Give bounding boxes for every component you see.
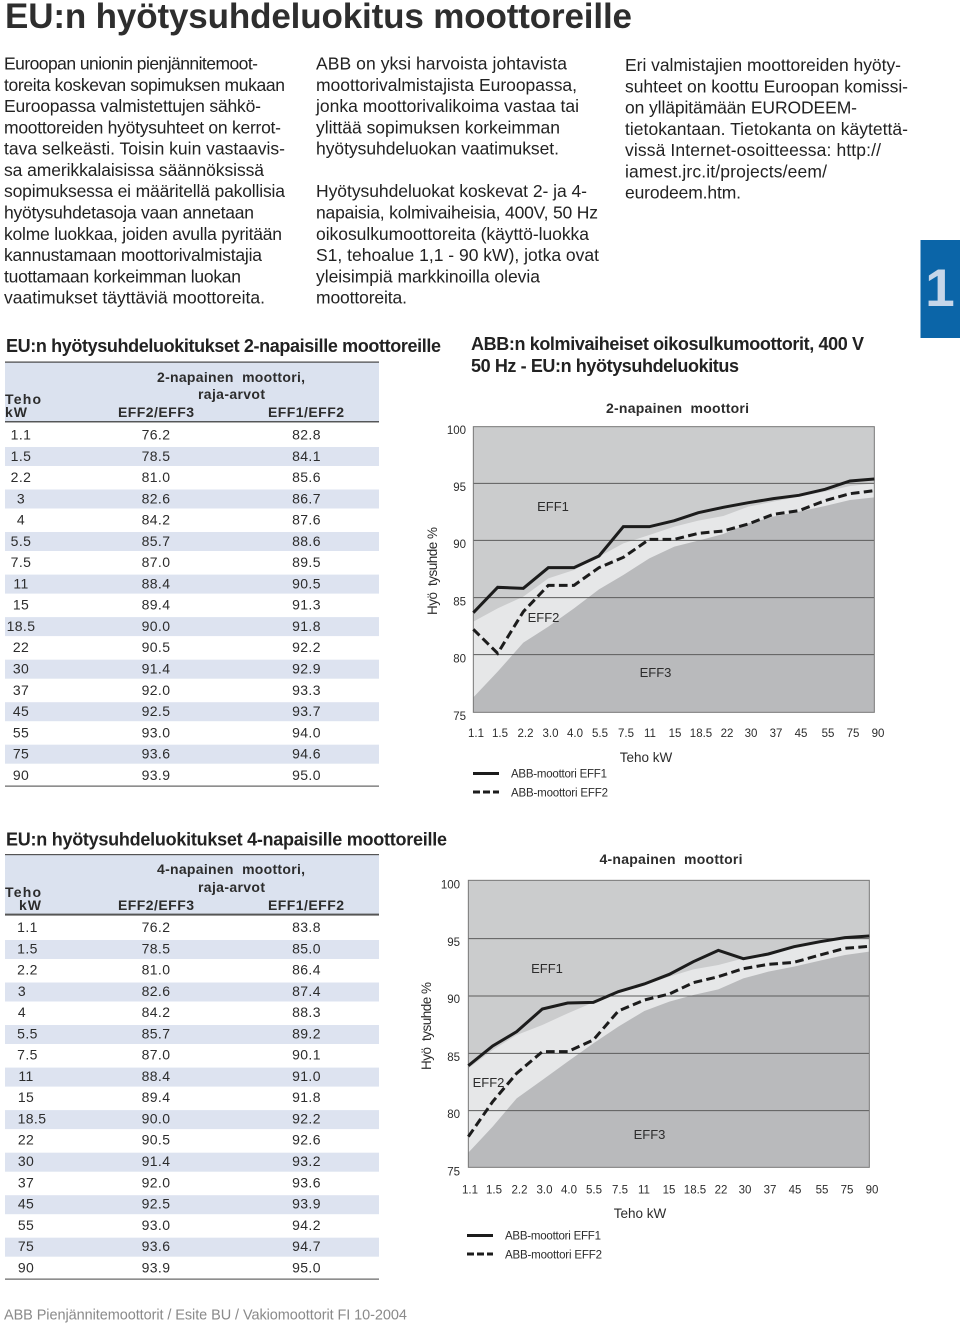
table: 2-pole limits: 55: [13, 724, 29, 740]
table: 4-pole limits: 2.2: [17, 962, 38, 978]
x axis ticks: 1.5: [492, 728, 508, 740]
table: 4-pole limits: 18.5: [18, 1110, 46, 1126]
table: 2-pole limits: 87.6: [292, 512, 321, 528]
y axis ticks: 95: [447, 937, 460, 949]
x axis ticks: 5.5: [592, 728, 608, 740]
table: 2-pole limits: 94.0: [292, 724, 321, 740]
x axis ticks: 90: [872, 728, 884, 740]
table: 2-pole limits: 81.0: [142, 469, 170, 485]
table header: Teho: [5, 884, 41, 900]
table: 2-pole limits: 91.4: [142, 660, 170, 676]
table: 4-pole limits: 11: [18, 1068, 34, 1084]
table: 4-pole limits: 93.6: [142, 1238, 170, 1254]
x axis ticks: 11: [644, 728, 656, 740]
text block: column 1: Euroopan unionin pienjännitemoot-: [4, 54, 258, 74]
text block: column 1: moottoreiden hyötysuhteet on kerrot-: [4, 117, 281, 137]
x axis ticks: 1.1: [462, 1184, 478, 1196]
table: 4-pole limits: 95.0: [292, 1259, 321, 1275]
x axis label: Teho kW: [620, 750, 673, 765]
table: 4-pole limits: 84.2: [142, 1004, 170, 1020]
text block: column 1: kannustamaan moottorivalmistajia: [4, 245, 262, 265]
x axis ticks: 45: [789, 1184, 801, 1196]
text block: column 2: ABB on yksi harvoista johtavista: [316, 54, 567, 74]
table: 4-pole limits: 30: [18, 1153, 34, 1169]
table: 4-pole limits: 92.6: [292, 1132, 321, 1148]
text block: column 3: eurodeem.htm.: [625, 183, 741, 203]
zone labels: [473, 961, 665, 1142]
chart plot area: [468, 880, 869, 1167]
table: 4-pole limits: 90.1: [292, 1047, 321, 1063]
text block: column 3: Eri valmistajien moottoreiden hyöty-: [625, 55, 901, 75]
table: 4-pole limits: 91.8: [292, 1089, 321, 1105]
text block: column 3: [625, 55, 908, 203]
table: 4-pole limits: 93.9: [142, 1259, 170, 1275]
table: 2-pole limits: 94.6: [292, 746, 321, 762]
table header: EFF2/EFF3: [118, 404, 194, 420]
y axis ticks: 100: [447, 425, 466, 437]
table: 2-pole limits: 93.6: [142, 746, 170, 762]
chapter tab: [920, 240, 960, 338]
zone labels: EFF2: [473, 1075, 504, 1090]
footer: ABB Pienjännitemoottorit / Esite BU / Vakiomoottorit FI 10-2004: [4, 1307, 407, 1323]
x axis ticks: 90: [866, 1184, 878, 1196]
heading: table 4-pole: EU:n hyötysuhdeluokitukset 4-napaisille moottoreille: [6, 830, 447, 850]
table: 2-pole limits: 11: [13, 575, 29, 591]
table header: EFF2/EFF3: [118, 897, 194, 913]
x axis ticks: 22: [721, 728, 733, 740]
heading: table 2-pole: EU:n hyötysuhdeluokitukset 2-napaisille moottoreille: [6, 336, 441, 356]
table: 4-pole limits: 83.8: [292, 919, 321, 935]
x axis ticks: 75: [841, 1184, 853, 1196]
table: 4-pole limits: 89.4: [142, 1089, 170, 1105]
table: 2-pole limits: 90.0: [142, 618, 170, 634]
x axis ticks: 1.1: [468, 728, 484, 740]
text block: column 1: tava selkeästi. Toisin kuin vastaavis-: [4, 139, 285, 159]
table: 4-pole limits: 93.6: [292, 1174, 321, 1190]
table: 2-pole limits: 89.5: [292, 554, 321, 570]
chapter tab: 1: [925, 259, 955, 318]
text block: column 2: oikosulkumoottoreita (käyttö-luokka: [316, 224, 589, 244]
text block: column 1: hyötysuhdetasoja vaan annetaan: [4, 202, 254, 222]
x axis ticks: 37: [770, 728, 782, 740]
table: 4-pole limits: 87.0: [142, 1047, 170, 1063]
table: 2-pole limits: 5.5: [11, 533, 31, 549]
zone labels: EFF3: [634, 1127, 665, 1142]
table: 2-pole limits: 3: [17, 490, 25, 506]
zone labels: EFF1: [531, 961, 563, 976]
x axis ticks: 11: [638, 1184, 650, 1196]
table: 4-pole limits: 90: [18, 1259, 34, 1275]
x axis ticks: 55: [816, 1184, 828, 1196]
x axis ticks: 7.5: [618, 728, 634, 740]
table header: kW: [5, 404, 28, 420]
table: 4-pole limits: 7.5: [17, 1047, 38, 1063]
table: 4-pole limits: 92.5: [142, 1196, 170, 1212]
table: 2-pole limits: 93.9: [142, 767, 170, 783]
y axis ticks: 80: [447, 1109, 460, 1121]
y axis ticks: [441, 880, 460, 1178]
table: 2-pole limits: 95.0: [292, 767, 321, 783]
text block: column 2: S1, tehoalue 1,1 - 90 kW), jotka ovat: [316, 245, 599, 265]
table: 2-pole limits: 1.1: [11, 426, 31, 442]
table: 2-pole limits: 90.5: [292, 575, 321, 591]
x axis ticks: 5.5: [586, 1184, 602, 1196]
table: 4-pole limits: 91.0: [292, 1068, 321, 1084]
text block: column 2: Hyötysuhdeluokat koskevat 2- ja 4-: [316, 181, 587, 201]
x axis label: Teho kW: [614, 1206, 667, 1221]
table: 4-pole limits: 93.0: [142, 1217, 170, 1233]
chart title: 2-napainen moottori: [606, 400, 749, 416]
x axis ticks: 4.0: [567, 728, 583, 740]
table: 4-pole limits: 91.4: [142, 1153, 170, 1169]
text block: column 2: ylittää sopimuksen korkeimman: [316, 117, 560, 137]
x axis ticks: [462, 1184, 878, 1196]
table: 2-pole limits: 91.3: [292, 597, 321, 613]
table: 2-pole limits: 85.6: [292, 469, 321, 485]
table: 4-pole limits: 1.5: [17, 940, 38, 956]
x axis ticks: 45: [795, 728, 807, 740]
table: 4-pole limits: 55: [18, 1217, 34, 1233]
chart: 4-pole motor: [419, 851, 878, 1262]
heading: charts section: ABB:n kolmivaiheiset oikosulkumoottorit, 400 V: [471, 334, 864, 354]
x axis ticks: 3.0: [542, 728, 558, 740]
x axis ticks: 18.5: [690, 728, 712, 740]
text block: column 3: tietokantaan. Tietokanta on käytettä-: [625, 119, 908, 139]
table: 4-pole limits: 87.4: [292, 983, 321, 999]
legend: ABB-moottori EFF2: [511, 788, 608, 800]
x axis ticks: 2.2: [512, 1184, 528, 1196]
table: 4-pole limits: 92.0: [142, 1174, 170, 1190]
chart plot area: [473, 427, 874, 712]
text block: column 2: jonka moottorivalikoima vastaa tai: [315, 96, 579, 116]
table header: 4-napainen moottori,: [157, 861, 305, 877]
y axis ticks: 80: [453, 654, 466, 666]
y axis ticks: [447, 425, 466, 723]
text block: column 2: napaisia, kolmivaiheisia, 400V, 50 Hz: [316, 202, 598, 222]
y axis ticks: 95: [453, 482, 466, 494]
table: 4-pole limits: 75: [18, 1238, 34, 1254]
table: 2-pole limits: 82.8: [292, 426, 321, 442]
table: 2-pole limits: 88.4: [142, 575, 170, 591]
table header: Teho: [5, 391, 41, 407]
zone labels: EFF1: [537, 499, 569, 514]
text block: column 1: sopimuksessa ei määritellä pakollisia: [4, 181, 285, 201]
table: 4-pole limits: 85.0: [292, 940, 321, 956]
text block: column 1: Euroopassa valmistettujen sähkö-: [4, 96, 261, 116]
table: 2-pole limits: 76.2: [142, 426, 170, 442]
x axis ticks: 30: [739, 1184, 751, 1196]
table header: 2-napainen moottori,: [157, 369, 305, 385]
y axis label: Hyö tysuhde %: [425, 527, 440, 615]
legend: ABB-moottori EFF1: [505, 1230, 601, 1242]
table: 4-pole limits: 93.2: [292, 1153, 321, 1169]
table: 4-pole limits: 45: [18, 1196, 34, 1212]
table: 4-pole limits: 85.7: [142, 1025, 170, 1041]
table: 4-pole limits: 89.2: [292, 1025, 321, 1041]
x axis ticks: 18.5: [684, 1184, 706, 1196]
table: 4-pole limits: 1.1: [17, 919, 38, 935]
x axis ticks: 75: [847, 728, 859, 740]
table: 4-pole limits: 3: [18, 983, 26, 999]
zone labels: EFF2: [528, 610, 559, 625]
x axis ticks: 55: [822, 728, 834, 740]
table: 2-pole limits: 93.3: [292, 682, 321, 698]
table: 2-pole limits: 92.0: [142, 682, 170, 698]
x axis ticks: 37: [764, 1184, 776, 1196]
table: 2-pole limits: 84.2: [142, 512, 170, 528]
table: 4-pole limits: 93.9: [292, 1196, 321, 1212]
table: 2-pole limits: 90.5: [142, 639, 170, 655]
table: 2-pole limits: 87.0: [142, 554, 170, 570]
table: 2-pole limits: 91.8: [292, 618, 321, 634]
table: 2-pole limits: 1.5: [11, 448, 31, 464]
y axis label: Hyö tysuhde %: [419, 982, 434, 1070]
x axis ticks: 15: [663, 1184, 675, 1196]
text block: column 1: tuottamaan korkeimman luokan: [4, 266, 241, 286]
y axis ticks: 90: [453, 539, 466, 551]
table: 4-pole limits: 15: [18, 1089, 34, 1105]
table header: EFF1/EFF2: [268, 897, 344, 913]
table: 2-pole limits: 93.7: [292, 703, 321, 719]
y axis ticks: 85: [447, 1052, 460, 1064]
table: 2-pole limits: 85.7: [142, 533, 170, 549]
table: 2-pole limits: 93.0: [142, 724, 170, 740]
text block: column 2: yleisimpiä markkinoilla olevia: [316, 266, 540, 286]
zone labels: [528, 499, 671, 680]
chart title: 4-napainen moottori: [600, 851, 742, 867]
y axis ticks: 85: [453, 596, 466, 608]
table header: raja-arvot: [198, 879, 265, 895]
table: 4-pole limits: 88.4: [142, 1068, 170, 1084]
y axis ticks: 75: [447, 1166, 460, 1178]
y axis ticks: 75: [453, 711, 466, 723]
text block: column 2: [315, 54, 599, 308]
text block: column 1: toreita koskevan sopimuksen mukaan: [4, 75, 285, 95]
text block: column 3: vissä Internet-osoitteessa: http://: [625, 140, 881, 160]
legend: [473, 768, 608, 800]
table: 4-pole limits: 5.5: [17, 1025, 38, 1041]
text block: column 3: suhteet on koottu Euroopan komissi-: [625, 76, 908, 96]
table: 2-pole limits: 15: [13, 597, 29, 613]
table: 4-pole limits: 76.2: [142, 919, 170, 935]
table: 2-pole limits: 4: [17, 512, 25, 528]
table: 2-pole limits: 30: [13, 660, 29, 676]
heading: charts section: [471, 334, 864, 376]
text block: column 2: hyötysuhdeluokan vaatimukset.: [316, 139, 559, 159]
text block: column 1: kolme luokkaa, joiden avulla pyritään: [4, 224, 282, 244]
x axis ticks: 3.0: [536, 1184, 552, 1196]
table: 2-pole limits: 22: [13, 639, 29, 655]
table: 2-pole limits: 18.5: [7, 618, 35, 634]
table: 2-pole limits: 92.2: [292, 639, 321, 655]
table: 4-pole limits: 81.0: [142, 962, 170, 978]
table: 4-pole limits: 82.6: [142, 983, 170, 999]
table: 2-pole limits: 90: [13, 767, 29, 783]
table: 2-pole limits: 86.7: [292, 490, 321, 506]
table: 2-pole limits: 92.5: [142, 703, 170, 719]
table header: EFF1/EFF2: [268, 404, 344, 420]
legend: [467, 1230, 602, 1262]
table: 2-pole limits: 7.5: [11, 554, 31, 570]
table: 2-pole limits: 82.6: [142, 490, 170, 506]
table: 4-pole limits: 37: [18, 1174, 34, 1190]
x axis ticks: 7.5: [612, 1184, 628, 1196]
table header: [5, 854, 379, 916]
text block: column 2: moottorivalmistajista Euroopassa,: [316, 75, 577, 95]
table: 2-pole limits: [5, 362, 379, 787]
text block: column 2: moottoreita.: [316, 288, 407, 308]
text block: column 1: [4, 54, 285, 308]
table: 4-pole limits: 22: [18, 1132, 34, 1148]
table: 2-pole limits: 89.4: [142, 597, 170, 613]
x axis ticks: 15: [669, 728, 681, 740]
x axis ticks: 4.0: [561, 1184, 577, 1196]
table header: raja-arvot: [198, 386, 265, 402]
table: 2-pole limits: 88.6: [292, 533, 321, 549]
table header: [5, 362, 379, 422]
table: 4-pole limits: 90.5: [142, 1132, 170, 1148]
zone labels: EFF3: [640, 665, 671, 680]
table: 4-pole limits: 90.0: [142, 1110, 170, 1126]
table: 2-pole limits: 75: [13, 746, 29, 762]
x axis ticks: 22: [715, 1184, 727, 1196]
table: 4-pole limits: 92.2: [292, 1110, 321, 1126]
table: 4-pole limits: 4: [18, 1004, 26, 1020]
chart: 2-pole motor: [425, 400, 884, 800]
text block: column 1: sa amerikkalaisissa säännöksissä: [4, 160, 264, 180]
table: 4-pole limits: 94.2: [292, 1217, 321, 1233]
x axis ticks: [468, 728, 884, 740]
x axis ticks: 30: [745, 728, 757, 740]
legend: ABB-moottori EFF1: [511, 768, 607, 780]
x axis ticks: 1.5: [486, 1184, 502, 1196]
text block: column 3: on ylläpitämään EURODEEM-: [625, 98, 857, 118]
table: 4-pole limits: 94.7: [292, 1238, 321, 1254]
table: 2-pole limits: 84.1: [292, 448, 321, 464]
text block: column 3: iamest.jrc.it/projects/eem/: [625, 161, 827, 181]
table: 4-pole limits: [5, 854, 379, 1280]
table: 4-pole limits: 86.4: [292, 962, 321, 978]
table: 2-pole limits: 37: [13, 682, 29, 698]
x axis ticks: 2.2: [518, 728, 534, 740]
heading: charts section: 50 Hz - EU:n hyötysuhdeluokitus: [471, 356, 739, 376]
y axis ticks: 90: [447, 994, 460, 1006]
legend: ABB-moottori EFF2: [505, 1250, 602, 1262]
table: 2-pole limits: 2.2: [11, 469, 31, 485]
y axis ticks: 100: [441, 880, 460, 892]
table: 2-pole limits: 92.9: [292, 660, 321, 676]
table: 2-pole limits: 78.5: [142, 448, 170, 464]
table: 2-pole limits: 45: [13, 703, 29, 719]
table: 4-pole limits: 78.5: [142, 940, 170, 956]
table: 4-pole limits: 88.3: [292, 1004, 321, 1020]
table header: kW: [19, 897, 42, 913]
text block: column 1: vaatimukset täyttäviä moottoreita.: [4, 288, 265, 308]
